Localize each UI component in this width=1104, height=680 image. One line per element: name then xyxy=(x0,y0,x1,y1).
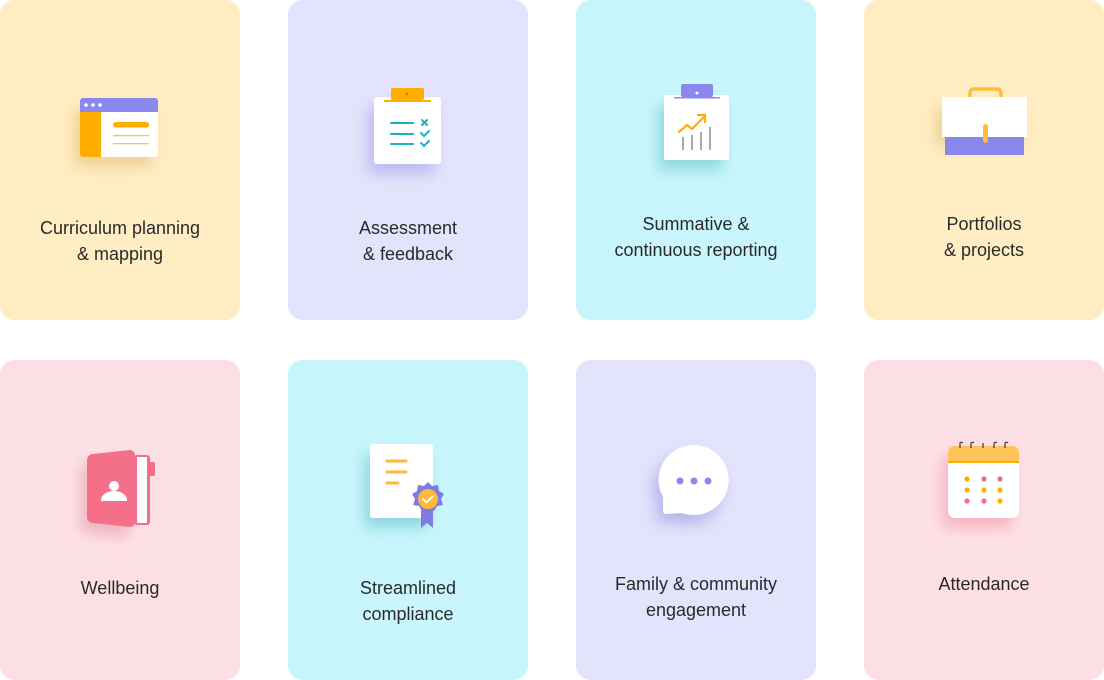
label: & mapping xyxy=(77,244,163,264)
icon: chat bubble xyxy=(647,445,728,530)
label xyxy=(614,214,778,260)
label xyxy=(615,574,777,620)
label xyxy=(40,218,200,264)
icon: briefcase xyxy=(930,87,1028,155)
label: & feedback xyxy=(363,244,453,264)
card: portfolios xyxy=(864,0,1104,320)
label xyxy=(359,218,457,264)
icon: clipboard checklist xyxy=(362,88,441,180)
card: attendance xyxy=(864,360,1104,680)
card: summative reporting xyxy=(576,0,816,320)
card: family engagement xyxy=(576,360,816,680)
card: wellbeing xyxy=(0,360,240,680)
label: engagement xyxy=(646,600,746,620)
card: assessment xyxy=(288,0,528,320)
label: Attendance xyxy=(938,574,1030,594)
label: Family & community xyxy=(615,574,777,594)
icon: browser window xyxy=(68,98,158,174)
label: Wellbeing xyxy=(81,578,159,598)
icon: report chart xyxy=(651,84,730,177)
label xyxy=(360,578,456,624)
label: Curriculum planning xyxy=(40,218,200,238)
label: Summative & xyxy=(642,214,750,234)
label: compliance xyxy=(362,604,454,624)
icon: notebook xyxy=(75,450,155,542)
icon: certificate xyxy=(357,444,444,535)
card: curriculum planning xyxy=(0,0,240,320)
label: Assessment xyxy=(359,218,457,238)
card: compliance xyxy=(288,360,528,680)
label: Portfolios xyxy=(946,214,1022,234)
label: continuous reporting xyxy=(614,240,778,260)
label: & projects xyxy=(944,240,1024,260)
label xyxy=(944,214,1024,260)
icon: calendar xyxy=(936,442,1019,534)
label: Streamlined xyxy=(360,578,456,598)
